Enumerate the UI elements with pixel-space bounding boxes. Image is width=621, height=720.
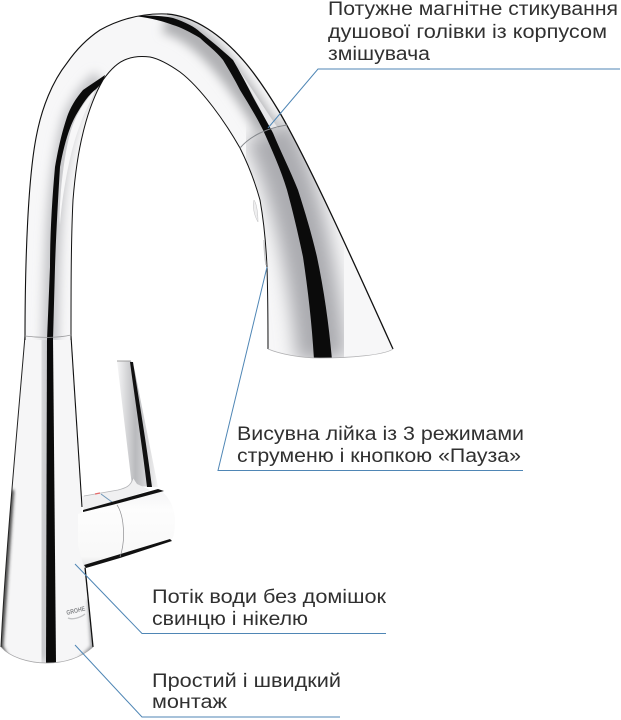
mixer cylinder (78, 489, 175, 568)
callout text: magnetic docking: змішувача (328, 43, 430, 65)
leader line: water purity (75, 564, 386, 634)
chrome reflection stripe: arch to head (133, 16, 332, 360)
callout: water purity (75, 564, 386, 634)
callout text: magnetic docking (328, 0, 618, 65)
callout: easy installation (75, 645, 341, 717)
logo: GROHE (66, 605, 86, 619)
callout: pull-out spray (218, 267, 524, 470)
callout: magnetic docking (268, 0, 620, 128)
faucet body (1, 330, 93, 663)
chrome reflection stripe: stem to arch (47, 75, 105, 340)
leader line: pull-out spray (218, 267, 523, 470)
spout arch and pull-out spray head (25, 14, 393, 360)
callout text: pull-out spray: струменю і кнопкою «Пауза» (237, 445, 521, 467)
lever handle (82, 361, 158, 512)
faucet illustration (1, 14, 393, 663)
callout text: easy installation: Простий і швидкий (152, 670, 341, 692)
callout text: water purity (152, 586, 386, 630)
logo: GROHE: GROHE (66, 605, 86, 617)
callout text: easy installation (152, 670, 341, 713)
callout text: water purity: Потік води без домішок (152, 586, 386, 608)
callout text: pull-out spray: Висувна лійка із 3 режимами (237, 423, 524, 445)
leader line: magnetic docking (268, 69, 620, 128)
callout text: pull-out spray (237, 423, 524, 467)
leader line: easy installation (75, 645, 340, 717)
callout text: easy installation: монтаж (152, 691, 228, 713)
callout text: water purity: свинцю і нікелю (152, 608, 308, 630)
callout text: magnetic docking: душової голівки із корпусом (328, 21, 607, 43)
